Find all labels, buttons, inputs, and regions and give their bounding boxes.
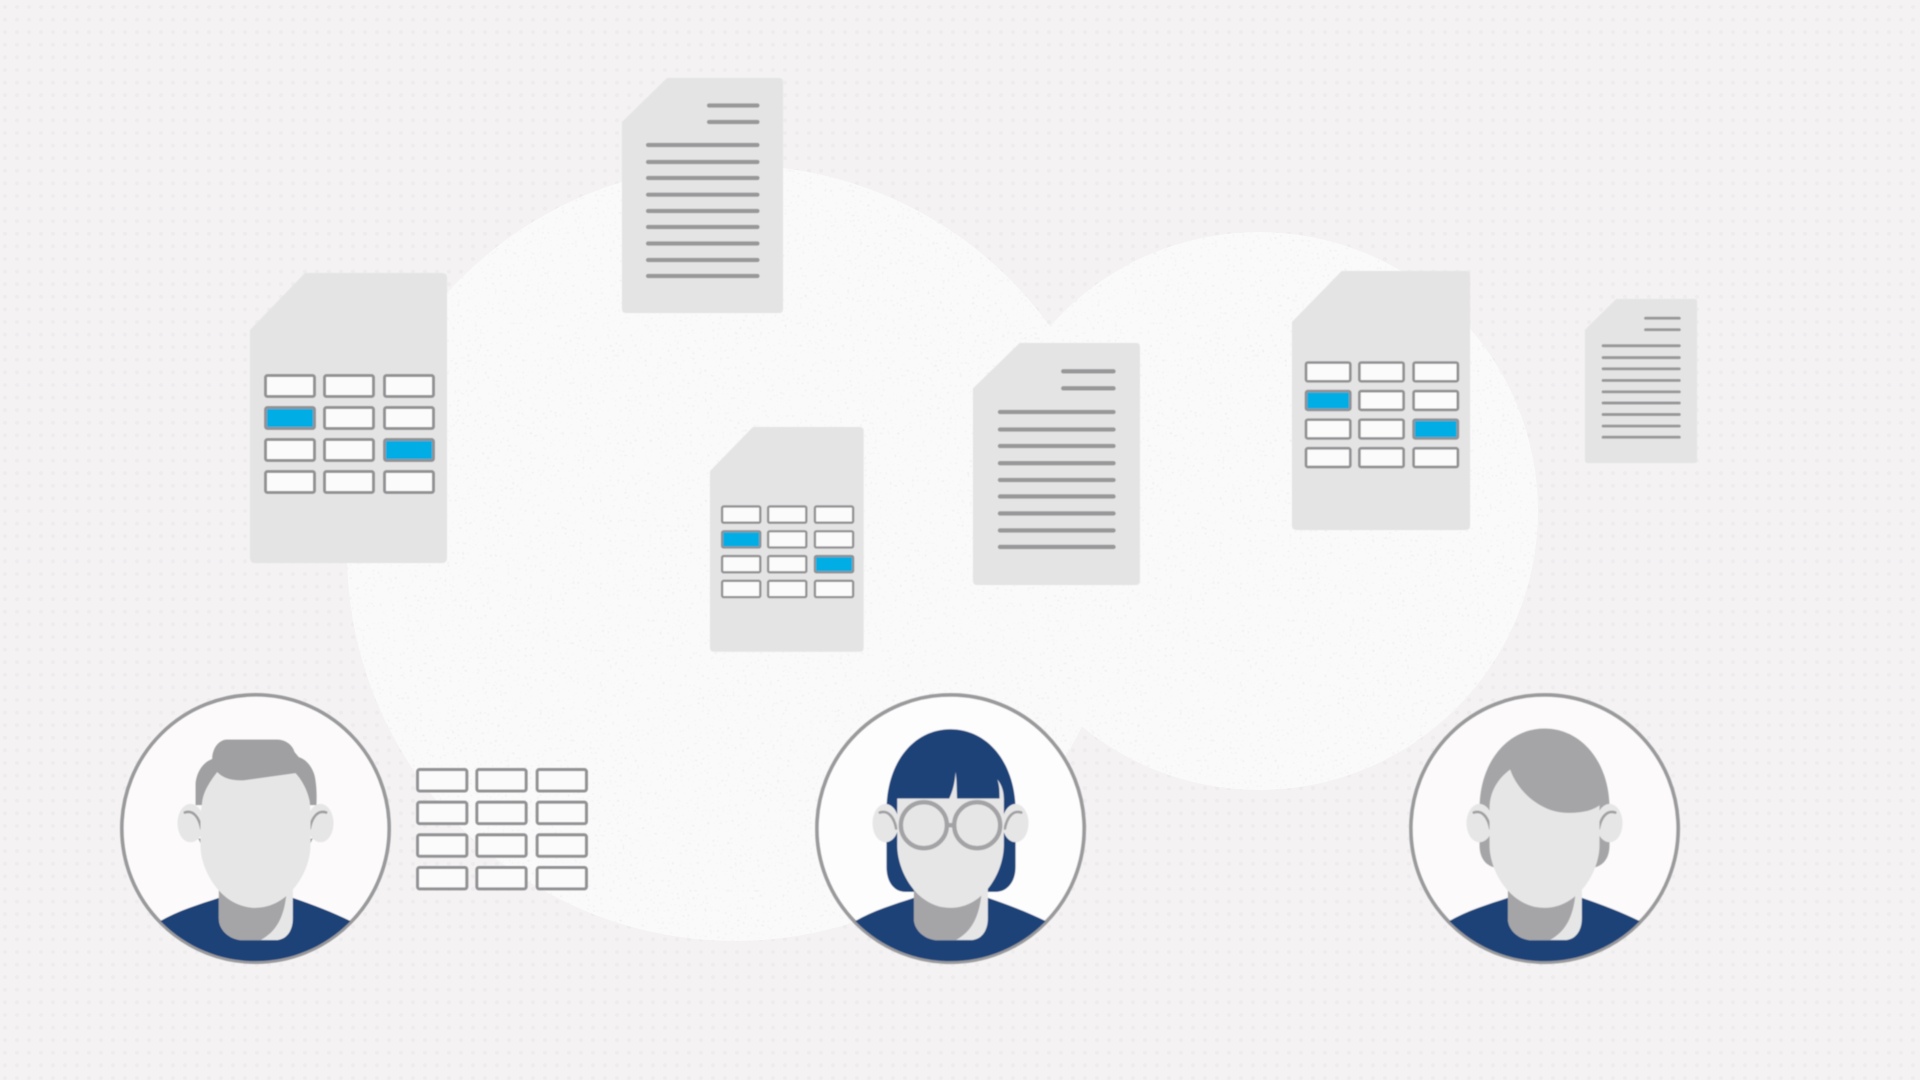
- neck: [1508, 885, 1582, 940]
- avatar: woman with glasses: [817, 695, 1084, 968]
- document: text page top: [622, 78, 783, 313]
- document: small text page far right: [1585, 299, 1697, 463]
- hair: [196, 740, 317, 848]
- neck: [219, 885, 293, 940]
- face: [1490, 770, 1599, 908]
- face: [897, 772, 1004, 908]
- document: small spreadsheet centre: [710, 427, 864, 652]
- shirt: [160, 898, 350, 962]
- neck: [914, 885, 988, 940]
- avatar: man with short hair: [122, 695, 389, 968]
- document: spreadsheet right: [1292, 271, 1470, 530]
- hair: [1480, 729, 1609, 868]
- ears: [178, 804, 333, 842]
- ears: [873, 804, 1028, 842]
- loose empty table: [418, 770, 586, 889]
- hair: [887, 729, 1015, 892]
- avatar: person with side-swept hair: [1411, 695, 1678, 968]
- cloud shape: [351, 168, 1531, 941]
- document: text page centre: [973, 343, 1140, 585]
- shirt: [1448, 898, 1641, 968]
- document: large spreadsheet left: [250, 273, 447, 563]
- glasses: [901, 802, 1000, 848]
- face: [201, 772, 310, 908]
- ears: [1467, 804, 1622, 842]
- shirt: [854, 898, 1047, 968]
